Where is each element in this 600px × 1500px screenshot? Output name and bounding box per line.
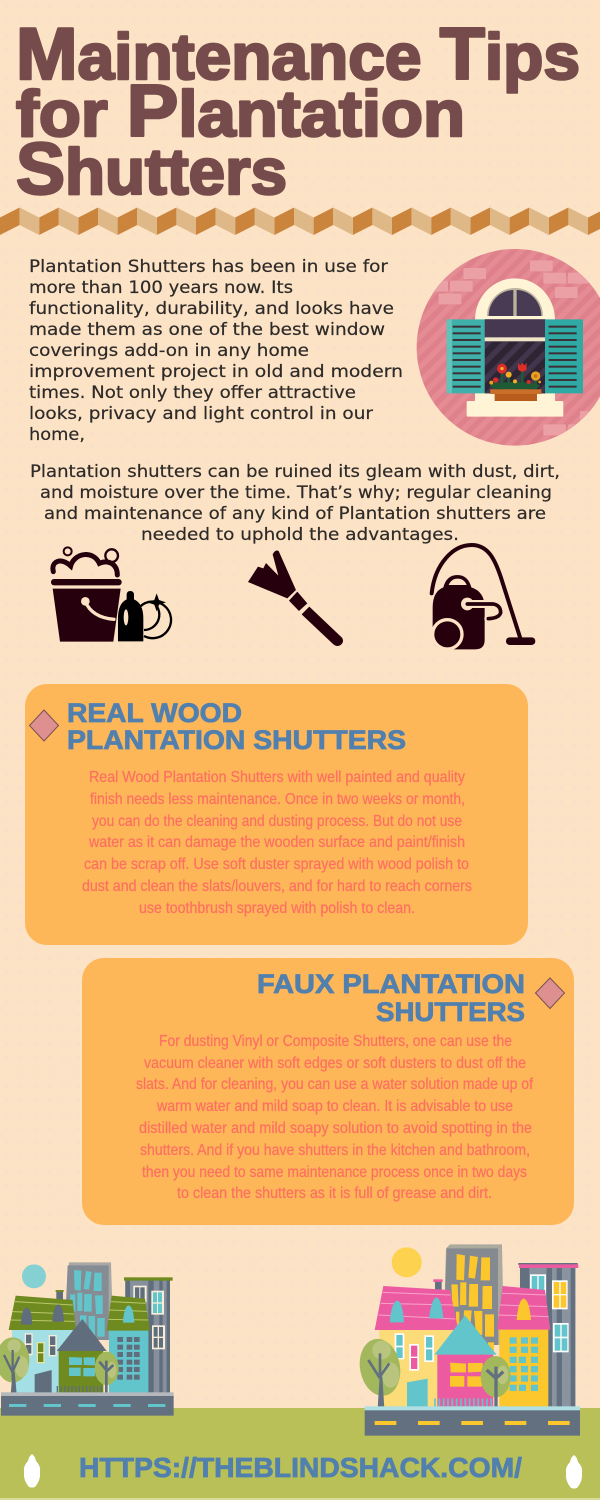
body text: dust and clean the slats/louvers, and for hard to reach corners [82,878,472,895]
window frame and arch [475,278,555,403]
diamond bullet [536,978,564,1008]
intro paragraph: coverings add-on in any home [29,341,309,361]
trees [355,1336,405,1399]
right shutter [545,319,583,393]
body text: For dusting Vinyl or Composite Shutters, one can use the [159,1033,512,1050]
body text: Real Wood Plantation Shutters with well painted and quality [89,769,465,786]
heading: PLANTATION SHUTTERS [67,725,406,755]
panel: faux plantation shutters [82,958,574,1225]
second paragraph: and maintenance of any kind of Plantation shutters are [44,504,546,524]
zigzag divider band [0,208,600,235]
icon: bucket with suds and bottle [51,547,171,642]
body text: use toothbrush sprayed with polish to clean. [139,900,415,917]
tower [443,1244,504,1345]
body text: finish needs less maintenance. Once in two weeks or month, [90,791,465,808]
second paragraph: and moisture over the time. That’s why; regular cleaning [40,483,552,503]
title: Maintenance Tips [16,14,580,95]
flower box [490,389,541,402]
body text: vacuum cleaner with soft edges or soft dusters to dust off the [144,1055,526,1072]
right house [109,1330,148,1393]
panel: real wood plantation shutters [25,684,528,945]
body text [82,769,472,917]
body text: shutters. And if you have shutters in the kitchen and bathroom, [140,1142,530,1159]
icon: left white drop [24,1454,40,1488]
road [1,1392,174,1397]
intro paragraph: more than 100 years now. Its [29,278,293,298]
body text: slats. And for cleaning, you can use a water solution made up of [136,1076,533,1093]
heading [67,698,406,755]
bricks [433,260,597,435]
intro paragraph: home, [29,425,85,445]
center house [59,1351,103,1393]
second paragraph: needed to uphold the advantages. [141,525,459,545]
second paragraph [30,462,560,545]
body text: then you need to same maintenance process once in two days [142,1164,527,1181]
icon: right white drop [566,1455,582,1488]
intro paragraph: times. Not only they offer attractive [29,383,356,403]
tower [63,1262,113,1340]
body text: water as it can damage the wooden surface and paint/finish [88,834,465,851]
intro paragraph: improvement project in old and modern [29,362,403,382]
heading [257,969,525,1027]
green ground band [0,1408,600,1500]
body text: distilled water and mild soapy solution to avoid spotting in the [139,1120,532,1137]
diamond bullet [30,710,58,741]
title: Shutters [16,129,287,210]
second paragraph: Plantation shutters can be ruined its gleam with dust, dirt, [30,462,560,482]
body text: to clean the shutters as it is full of grease and dirt. [177,1185,492,1202]
trees [0,1337,29,1383]
icon: vacuum cleaner [432,545,535,649]
illustration: pink and yellow town [355,1244,580,1436]
intro paragraph: looks, privacy and light control in our [29,404,373,424]
body text: warm water and mild soap to clean. It is advisable to use [156,1098,513,1115]
intro paragraph: Plantation Shutters has been in use for [29,257,388,277]
title [16,14,580,210]
left shutter [447,319,485,393]
intro paragraph: functionality, durability, and looks have [29,299,394,319]
sun [22,1264,46,1288]
center house [437,1354,493,1407]
illustration: window with shutters on pink wall [417,249,600,446]
heading: REAL WOOD [67,698,242,728]
body text: can be scrap off. Use soft duster sprayed with wood polish to [84,856,469,873]
sun [392,1247,422,1277]
illustration: teal and green town [0,1262,174,1416]
left house [379,1328,459,1407]
website url: HTTPS://THEBLINDSHACK.COM/ [79,1452,522,1483]
intro paragraph [29,257,403,445]
left house [12,1328,73,1393]
intro paragraph: made them as one of the best window [29,320,385,340]
window sill [467,401,563,417]
icon: feather duster [248,550,343,646]
right house [499,1328,548,1407]
right tower [520,1265,575,1407]
title: for Plantation [16,71,465,152]
right tower [125,1278,170,1393]
flowers [489,363,541,390]
heading: FAUX PLANTATION [257,969,525,999]
heading: SHUTTERS [376,997,525,1027]
road [365,1406,580,1411]
body text: you can do the cleaning and dusting process. But do not use [92,813,462,830]
body text [136,1033,533,1202]
